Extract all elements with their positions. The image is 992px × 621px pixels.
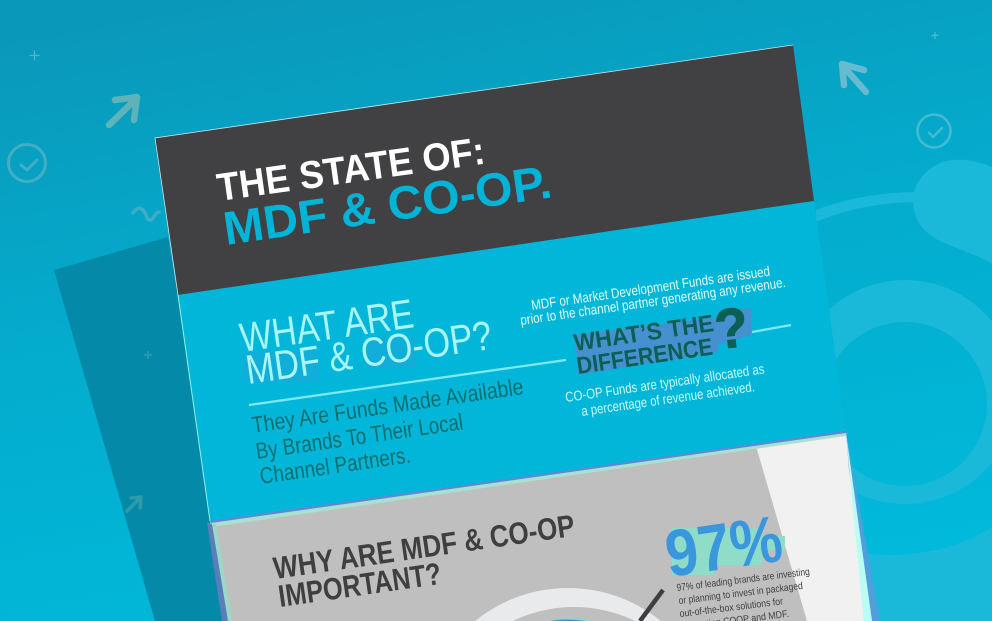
text: 97 percent description: or planning to invest in packaged: [678, 581, 803, 607]
icon: arrow top right: [842, 64, 866, 92]
icon: arrow on back page: [127, 497, 141, 511]
text: mdf explanation: MDF or Market Development Funds are issued: [530, 263, 771, 313]
text: funds definition: [250, 373, 525, 489]
icon: plus top left: [30, 50, 40, 60]
title line two: MDF & CO-OP.: [220, 155, 555, 255]
icon: check circle right: [918, 114, 950, 148]
panel: why important grey section: [210, 432, 876, 621]
header highlight edge: [155, 45, 793, 295]
poster: [155, 45, 880, 621]
icon: arrow top left: [109, 97, 137, 125]
text: funds definition: By Brands To Their Local: [254, 408, 465, 464]
text: 97 percent description: 97% of leading brands are investing: [676, 567, 810, 594]
panel: white strip: [756, 433, 864, 621]
panel: dark header: [155, 45, 814, 295]
back page shadow sheet: [54, 237, 232, 621]
heading: why important: WHY ARE MDF & CO-OP: [271, 508, 577, 586]
heading: what's the difference: DIFFERENCE: [575, 334, 714, 380]
heading: why important: IMPORTANT?: [276, 556, 443, 614]
edge artifact bands: [178, 295, 880, 621]
text: funds definition: Channel Partners.: [258, 442, 412, 489]
chart: ring gauge: [422, 588, 714, 621]
icon: squiggle left: [133, 208, 159, 220]
icon: plus top right: [932, 32, 938, 39]
heading: what's the difference: WHAT’S THE: [572, 310, 715, 357]
decorative background blob and ring: [793, 160, 992, 621]
icon: check circle left: [8, 144, 46, 182]
heading: what's the difference: ?: [712, 295, 751, 361]
pointer line: [640, 590, 663, 621]
icon: plus on back page: [144, 351, 152, 359]
divider right: [752, 325, 791, 332]
stat: 97 percent: 97%: [660, 501, 787, 591]
heading: why important: [271, 508, 577, 614]
heading: what are mdf and co-op: WHAT ARE: [237, 290, 416, 361]
text: 97 percent description: [676, 567, 810, 621]
heading: what's the difference: [572, 295, 751, 380]
text: 97 percent description: out-of-the-box solutions for: [679, 596, 784, 620]
heading: what are mdf and co-op: MDF & CO-OP?: [243, 312, 495, 393]
text: co-op explanation: a percentage of revenue achieved.: [580, 378, 756, 419]
text: mdf explanation: prior to the channel partner generating any revenue.: [519, 274, 787, 328]
title: [214, 130, 555, 255]
text: co-op explanation: [564, 360, 765, 419]
text: funds definition: They Are Funds Made Available: [250, 373, 525, 438]
inner blue arc: [545, 618, 590, 621]
text: co-op explanation: CO-OP Funds are typically allocated as: [564, 360, 765, 405]
panel: what are blue section: [178, 201, 846, 522]
divider left: [249, 360, 566, 405]
title line one: THE STATE OF:: [214, 130, 488, 210]
